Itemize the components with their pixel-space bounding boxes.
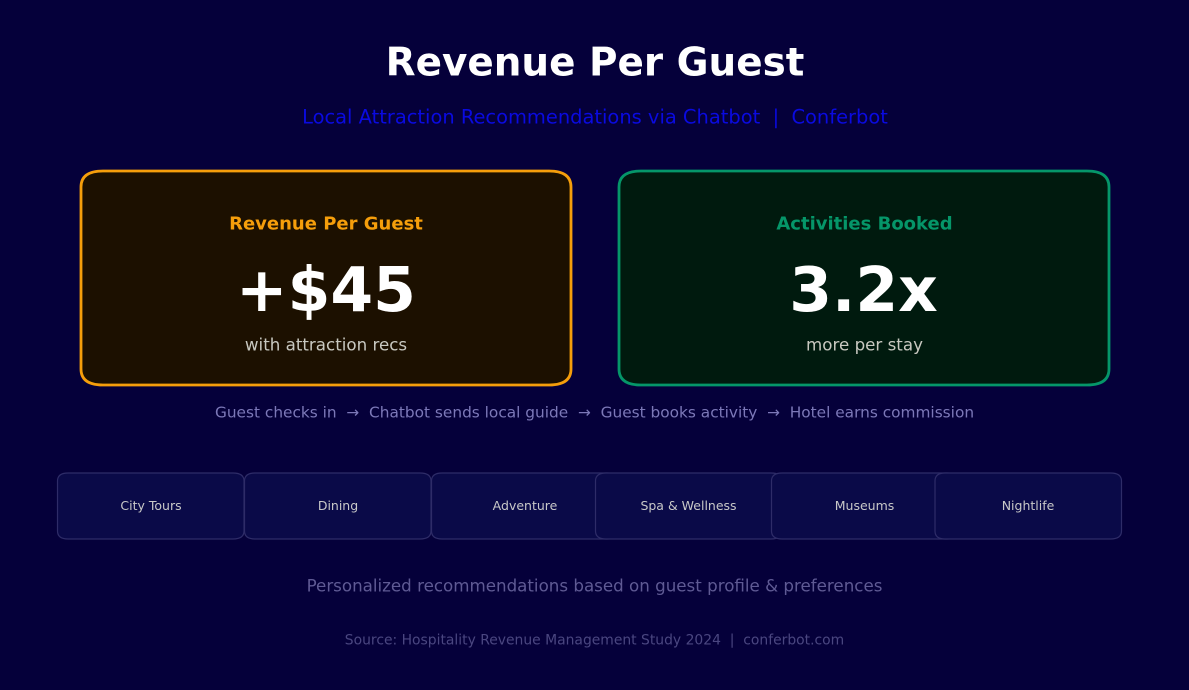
panel: revenue per guest (81, 171, 571, 385)
metric: 3.2x: 3.2x (789, 254, 938, 326)
pill: museums (772, 473, 958, 539)
panel heading: activities booked: Activities Booked (776, 214, 953, 234)
pill: spa and wellness: Spa & Wellness (640, 498, 737, 513)
tagline: Personalized recommendations based on guest profile & preferences (307, 576, 882, 596)
pill: adventure: Adventure (493, 498, 558, 513)
pill: dining (244, 473, 431, 539)
metric: +$45: +$45 (236, 254, 416, 326)
source note: Source: Hospitality Revenue Management Study 2024 | conferbot.com (345, 632, 844, 648)
pill: city tours (58, 473, 244, 539)
subtitle: Local Attraction Recommendations via Chatbot | Conferbot (302, 106, 888, 128)
pill: museums: Museums (835, 498, 894, 513)
caption: more per stay: more per stay (806, 334, 923, 354)
pill: dining: Dining (318, 498, 358, 513)
title: Revenue Per Guest (386, 40, 804, 86)
pill: city tours: City Tours (120, 498, 182, 513)
panel: activities booked (619, 171, 1109, 385)
panel heading: revenue per guest: Revenue Per Guest (229, 214, 423, 234)
caption: with attraction recs: with attraction recs (245, 334, 407, 354)
pill: adventure (432, 473, 618, 539)
pill: spa and wellness (596, 473, 782, 539)
pill: nightlife: Nightlife (1002, 498, 1055, 513)
pill: nightlife (935, 473, 1122, 539)
category pills (58, 473, 1122, 539)
process flow text: Guest checks in → Chatbot sends local guide → Guest books activity → Hotel earns commission (215, 404, 974, 422)
